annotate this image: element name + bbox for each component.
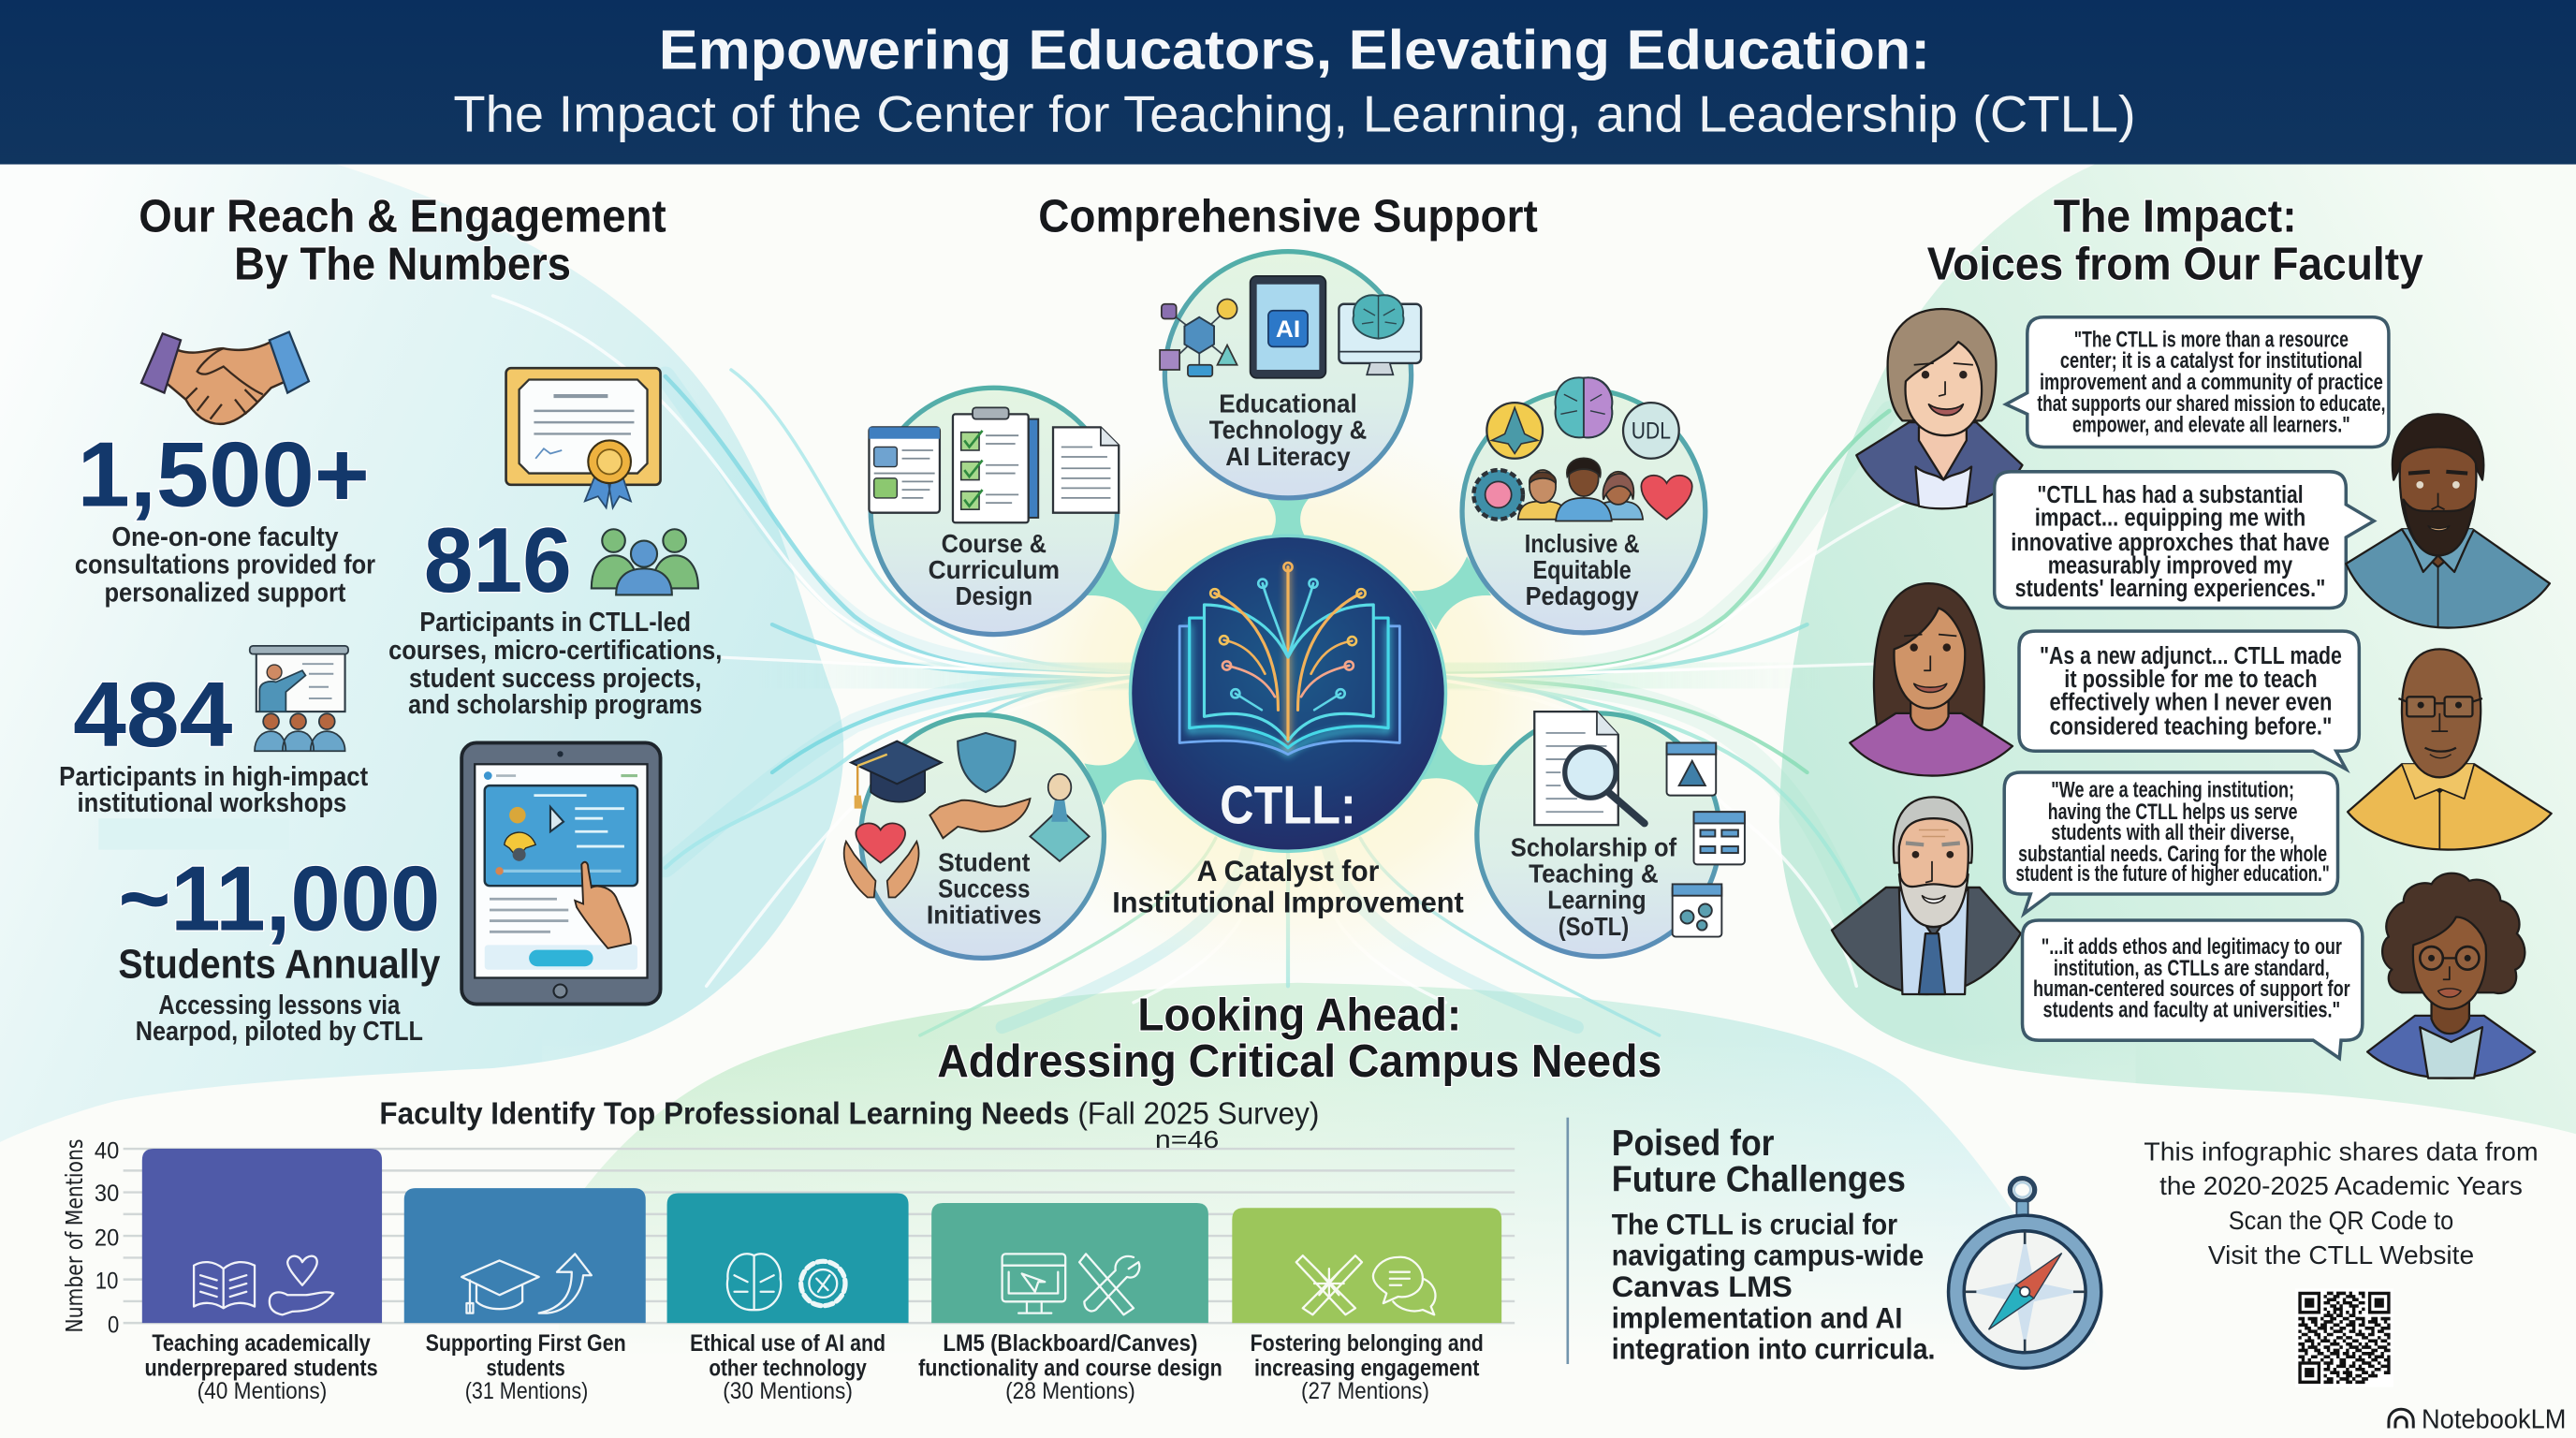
bubble: scholarship of teaching	[1477, 712, 1745, 957]
quote 4: student is the future of higher education."	[2016, 862, 2330, 887]
bar labels: other technology	[709, 1356, 867, 1381]
text: nearpod	[136, 990, 423, 1047]
title: Empowering Educators, Elevating Education:	[659, 19, 1930, 81]
bar labels: (31 Mentions)	[465, 1379, 588, 1404]
quote 2: impact... equipping me with	[2035, 504, 2305, 532]
heading: reach: By The Numbers	[234, 239, 571, 289]
text: workshops: institutional workshops	[77, 788, 346, 818]
label: Student	[938, 847, 1030, 876]
icon: handshake	[141, 332, 309, 424]
bar labels: Fostering belonging and	[1251, 1331, 1484, 1357]
icon: browser window	[869, 427, 940, 513]
icon: document	[1053, 427, 1119, 513]
icon: document with magnifier	[1534, 712, 1645, 825]
bar: lms	[931, 1203, 1208, 1323]
text: workshops	[59, 762, 368, 818]
quote 5	[2023, 920, 2363, 1058]
icon: certificate	[506, 368, 661, 507]
quote 5: institution, as CTLLs are standard,	[2054, 957, 2330, 981]
text: poised body: navigating campus-wide	[1612, 1239, 1924, 1272]
label: Initiatives	[927, 901, 1042, 930]
stat: 11,000: ~11,000	[118, 847, 440, 950]
bubble: course design	[869, 388, 1119, 635]
text: data note: Scan the QR Code to	[2229, 1206, 2453, 1235]
heading: comprehensive support: Comprehensive Support	[1038, 192, 1538, 242]
axis labels	[95, 1139, 119, 1339]
icon: helping hand	[929, 799, 1030, 838]
stat: 484: 484	[73, 663, 233, 766]
bar labels: functionality and course design	[918, 1356, 1222, 1381]
bar: first gen	[404, 1188, 646, 1323]
heading: looking ahead: Looking Ahead:	[1137, 990, 1461, 1041]
icon: udl badge	[1623, 403, 1679, 459]
quote 2: students' learning experiences."	[2015, 574, 2325, 602]
icon: graduation cap	[851, 741, 942, 809]
bar labels: Ethical use of AI and	[690, 1331, 886, 1357]
heading: reach	[139, 192, 666, 289]
logo: notebooklm: NotebookLM	[2422, 1404, 2566, 1434]
icon: cap and arrow	[461, 1254, 592, 1313]
icon: heart	[1641, 476, 1692, 520]
icon: book heart hand	[194, 1256, 333, 1314]
panel: data note and qr	[2144, 1137, 2566, 1434]
text: participants in courses	[388, 608, 722, 720]
icon: lightbulb badge	[1486, 403, 1543, 459]
background wave: impact panel	[1779, 165, 2576, 1134]
panel: poised for future challenges	[1566, 1118, 2101, 1368]
bar labels: (30 Mentions)	[723, 1379, 853, 1404]
bar labels: (27 Mentions)	[1301, 1379, 1429, 1404]
quote 4	[2004, 772, 2338, 914]
heading: looking ahead: Addressing Critical Campus Needs	[937, 1036, 1661, 1087]
icon: ai tablet	[1251, 276, 1325, 378]
quote 3: it possible for me to teach	[2064, 665, 2318, 693]
text: students annually: Students Annually	[118, 941, 441, 987]
axis labels: 20	[95, 1226, 119, 1252]
label: Course &	[942, 529, 1046, 558]
heading: poised: Future Challenges	[1612, 1160, 1906, 1200]
quote 4: substantial needs. Caring for the whole	[2018, 843, 2327, 867]
panel: faculty voices	[1832, 192, 2552, 1078]
flow lines bottom	[920, 838, 1660, 1035]
connectors	[1084, 493, 1498, 805]
label	[1525, 529, 1640, 610]
text: poised body: integration into curricula.	[1612, 1332, 1936, 1366]
background wave: looking ahead panel	[559, 983, 2119, 1381]
heading: poised	[1612, 1123, 1906, 1200]
text: catalyst: Institutional Improvement	[1112, 885, 1464, 918]
text: participants in courses: Participants in CTLL-led	[419, 608, 691, 638]
text: workshops: Participants in high-impact	[59, 762, 368, 792]
icon: diverse people	[1518, 458, 1643, 521]
icon: compass	[1949, 1179, 2101, 1368]
icon: gear	[1473, 470, 1523, 520]
chart title: Faculty Identify Top Professional Learning Needs	[379, 1097, 1070, 1132]
icon: brain	[1555, 377, 1612, 437]
subtitle: The Impact of the Center for Teaching, Learning, and Leadership (CTLL)	[453, 85, 2136, 142]
quote 1: that supports our shared mission to educate,	[2037, 392, 2385, 417]
bar labels: (28 Mentions)	[1005, 1379, 1135, 1404]
heading: poised: Poised for	[1612, 1123, 1775, 1164]
icon: people group	[592, 529, 698, 594]
text: poised body: Canvas LMS	[1612, 1269, 1793, 1303]
background wave: reach panel	[0, 165, 843, 1142]
text: consultations: consultations provided for	[75, 550, 375, 580]
quote 1: improvement and a community of practice	[2040, 371, 2383, 395]
hub: ctll	[1131, 536, 1445, 851]
label: Teaching &	[1529, 859, 1659, 888]
icon: presenter	[250, 646, 348, 751]
quote 5: "...it adds ethos and legitimacy to our	[2042, 935, 2342, 960]
axis labels: 40	[95, 1139, 119, 1165]
chart title: (Fall 2025 Survey)	[1077, 1097, 1319, 1132]
icon: clipboard	[953, 407, 1038, 522]
bubble: educational technology	[1160, 252, 1421, 498]
flow lines left	[493, 296, 1134, 986]
bar labels: increasing engagement	[1254, 1356, 1479, 1381]
heading: impact	[1927, 192, 2423, 289]
label	[1511, 833, 1677, 941]
quote 4: students with all their diverse,	[2051, 821, 2294, 845]
text: poised body: The CTLL is crucial for	[1612, 1207, 1897, 1240]
quote 2: innovative approxches that have	[2011, 528, 2330, 556]
quote 3: effectively when I never even	[2049, 687, 2332, 715]
avatar: woman with long hair	[1850, 583, 2012, 776]
label: (SoTL)	[1559, 912, 1629, 941]
text: data note: Visit the CTLL Website	[2208, 1240, 2474, 1269]
stat: 1,500+: 1,500+	[77, 423, 370, 526]
label	[1209, 389, 1367, 471]
quote 2	[1995, 472, 2374, 609]
background fade	[542, 1035, 2136, 1381]
bar chart	[61, 1139, 1515, 1339]
quote 4: having the CTLL helps us serve	[2048, 800, 2298, 825]
icon: network	[1160, 299, 1237, 376]
icon: small windows	[1667, 742, 1745, 937]
heading: impact: Voices from Our Faculty	[1927, 239, 2423, 289]
heading: reach: Our Reach & Engagement	[139, 192, 666, 242]
text: participants in courses: student success projects,	[409, 664, 701, 694]
label: Scholarship of	[1511, 833, 1677, 862]
label: Pedagogy	[1526, 581, 1639, 610]
panel: looking ahead	[61, 990, 1661, 1404]
header banner	[0, 0, 2576, 165]
text: poised body: implementation and AI	[1612, 1300, 1902, 1334]
label: Technology &	[1209, 416, 1367, 445]
icon: brain and gear	[727, 1254, 845, 1310]
icon: hands and chat	[1296, 1255, 1435, 1314]
heading: impact: The Impact:	[2054, 192, 2297, 242]
avatar: woman with curly hair	[2367, 873, 2535, 1078]
flow lines right	[1442, 411, 1939, 986]
axis labels: 0	[108, 1313, 119, 1339]
label: Curriculum	[929, 555, 1060, 584]
text: catalyst	[1112, 854, 1464, 918]
icon: shield	[958, 733, 1016, 792]
text: data note: the 2020-2025 Academic Years	[2159, 1171, 2523, 1200]
label	[929, 529, 1060, 610]
quote 2: measurably improved my	[2048, 551, 2293, 580]
heading: looking ahead	[937, 990, 1661, 1087]
label: Inclusive &	[1525, 529, 1640, 558]
text: poised body	[1612, 1207, 1936, 1366]
center glow	[976, 409, 1600, 985]
chart note: n=46	[1155, 1125, 1219, 1153]
icon: ai tablet: AI	[1276, 317, 1300, 343]
text: participants in courses: and scholarship programs	[408, 690, 702, 720]
quote 1: center; it is a catalyst for institutional	[2060, 349, 2363, 374]
bar labels: Teaching academically	[152, 1331, 371, 1357]
label: Equitable	[1533, 555, 1632, 584]
text: participants in courses: courses, micro-certifications,	[388, 636, 722, 666]
axis title: Number of Mentions	[61, 1139, 88, 1333]
avatar: older man with suit	[1832, 797, 2021, 994]
bar labels	[144, 1331, 1484, 1404]
icon: udl badge: UDL	[1632, 419, 1671, 445]
quote 1: "The CTLL is more than a resource	[2074, 328, 2349, 352]
avatar: woman with short hair	[1856, 309, 2023, 508]
bar labels: (40 Mentions)	[198, 1379, 327, 1404]
icon: heart in hands	[844, 823, 918, 897]
panel: comprehensive support	[844, 192, 1745, 958]
hub label: CTLL:	[1220, 775, 1356, 835]
axis labels: 30	[95, 1181, 119, 1207]
quote 3	[2019, 631, 2359, 770]
bubble: student success	[844, 715, 1104, 958]
bar: underprepared students	[142, 1149, 382, 1323]
text: nearpod: Nearpod, piloted by CTLL	[136, 1017, 423, 1047]
text: nearpod: Accessing lessons via	[158, 990, 401, 1020]
label: Design	[956, 581, 1032, 610]
label: Educational	[1219, 389, 1357, 418]
avatar: bald man with glasses	[2348, 649, 2552, 850]
text: data note	[2144, 1137, 2539, 1269]
quote 5: human-centered sources of support for	[2033, 977, 2350, 1002]
quote 2: "CTLL has had a substantial	[2037, 480, 2304, 508]
panel: reach and engagement	[59, 192, 722, 1047]
stat: 816: 816	[424, 508, 572, 611]
bar labels: underprepared students	[144, 1356, 378, 1381]
icon: book and tree glow	[1179, 563, 1399, 755]
quote 1	[2006, 317, 2389, 447]
text: consultations: personalized support	[104, 578, 346, 608]
axis labels: 10	[95, 1269, 118, 1294]
text: consultations	[75, 522, 375, 608]
text: data note: This infographic shares data from	[2144, 1137, 2539, 1166]
bubble: inclusive pedagogy	[1462, 377, 1705, 633]
icon: tablet	[461, 742, 661, 1005]
quote 3: "As a new adjunct... CTLL made	[2040, 641, 2342, 669]
text: catalyst: A Catalyst for	[1197, 854, 1379, 888]
label: Success	[938, 873, 1030, 902]
label	[927, 847, 1042, 930]
label: Learning	[1547, 886, 1647, 915]
bar: belonging	[1232, 1208, 1501, 1323]
icon: monitor and tools	[1003, 1254, 1139, 1314]
quote 5: students and faculty at universities."	[2042, 999, 2340, 1023]
icon: qr code	[2295, 1288, 2393, 1387]
icon: brain monitor	[1339, 295, 1421, 374]
bar: ethical ai	[667, 1193, 909, 1323]
avatar: man with beard	[2346, 414, 2550, 628]
bar labels: LM5 (Blackboard/Canves)	[943, 1331, 1197, 1357]
quote 4: "We are a teaching institution;	[2051, 778, 2294, 802]
text: consultations: One-on-one faculty	[111, 522, 339, 552]
label: AI Literacy	[1225, 442, 1351, 471]
bar labels: Supporting First Gen	[426, 1331, 626, 1357]
icon: seedling diamond	[1030, 774, 1090, 861]
quote 3: considered teaching before."	[2049, 712, 2332, 741]
bar labels: students	[487, 1356, 565, 1381]
quote 1: empower, and elevate all learners."	[2072, 414, 2350, 438]
